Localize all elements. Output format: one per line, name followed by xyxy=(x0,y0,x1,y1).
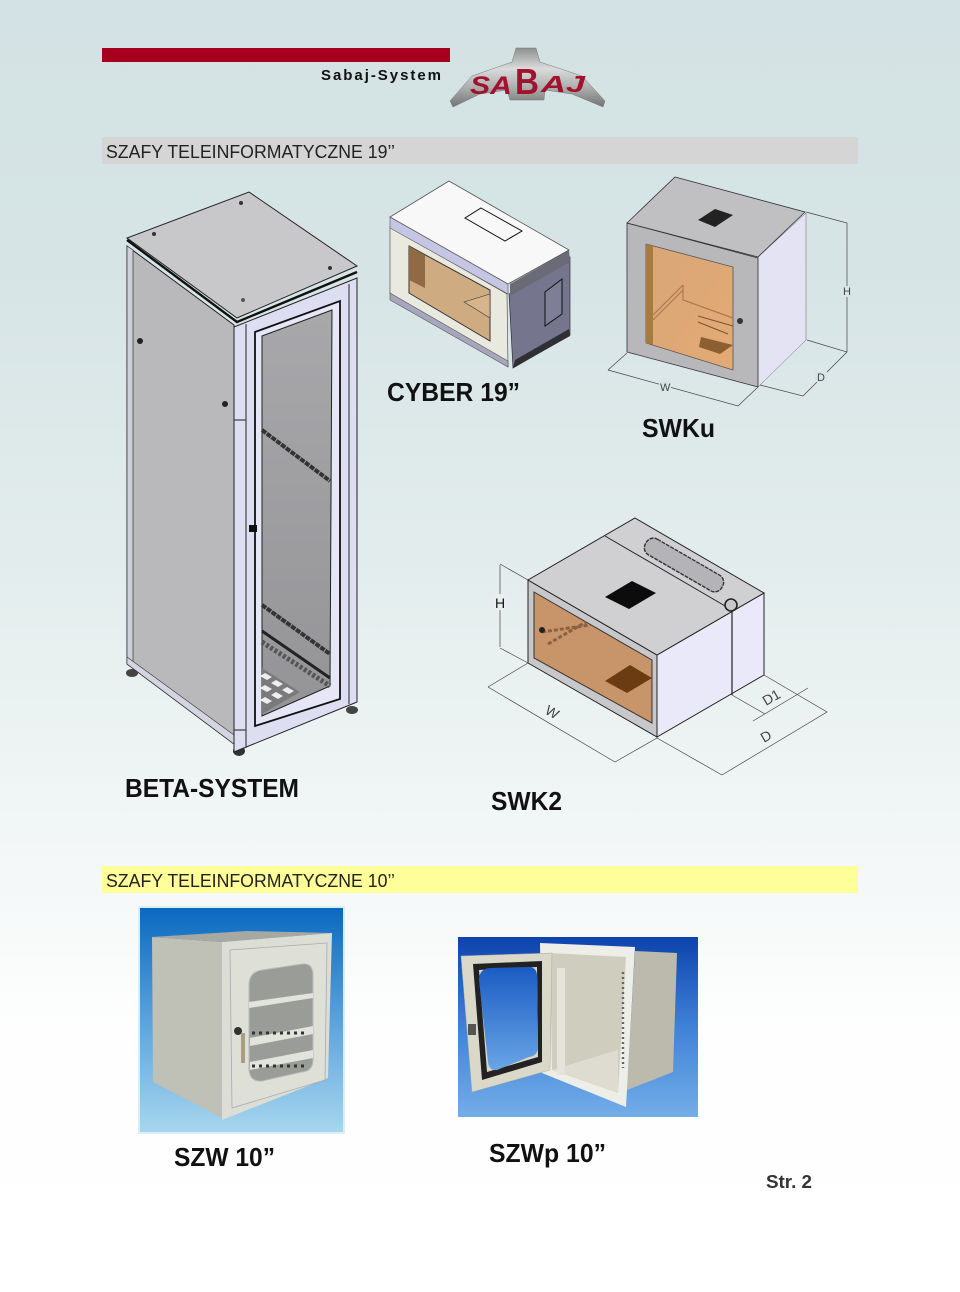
side xyxy=(758,213,806,387)
dimensions xyxy=(608,212,852,406)
door xyxy=(255,301,340,726)
floor grid xyxy=(262,668,300,714)
product: SWK2 wall cabinet xyxy=(488,518,827,775)
dimensions: D xyxy=(817,372,825,384)
side panel xyxy=(127,246,234,744)
photo: SZWp 10 cabinet xyxy=(458,937,698,1117)
dimensions: H xyxy=(495,595,505,611)
top xyxy=(627,177,805,257)
front xyxy=(528,580,657,737)
dimensions: H xyxy=(843,286,851,298)
dimensions: D xyxy=(758,727,774,746)
product: CYBER 19 wall cabinet xyxy=(390,181,570,368)
lilac band xyxy=(390,217,508,294)
label: SWK2: SWK2 xyxy=(491,786,562,816)
feet xyxy=(126,669,138,677)
product: SWKu wall cabinet xyxy=(608,177,852,406)
dimensions: W xyxy=(542,702,563,723)
icon: Sabaj logo: SA xyxy=(470,72,512,100)
icon: Sabaj logo xyxy=(450,48,605,107)
section heading: 10 inch cabinets: SZAFY TELEINFORMATYCZNE 10’’ xyxy=(106,871,395,891)
shelf rails xyxy=(262,430,330,654)
side xyxy=(509,257,570,368)
company name: Sabaj-System xyxy=(321,67,441,84)
front xyxy=(390,227,508,367)
dimensions: D1 xyxy=(760,686,783,709)
door glass xyxy=(262,310,332,716)
dimensions xyxy=(488,564,827,775)
dimensions: W xyxy=(660,382,671,394)
label: SWKu: SWKu xyxy=(642,413,715,443)
photo: SZW 10 cabinet xyxy=(138,906,345,1134)
icon: Sabaj logo: B xyxy=(515,61,539,102)
section heading: 19 inch cabinets: SZAFY TELEINFORMATYCZNE 19’’ xyxy=(106,142,395,162)
handle and knobs xyxy=(249,525,257,532)
label: BETA-SYSTEM: BETA-SYSTEM xyxy=(125,773,299,803)
top xyxy=(127,192,357,318)
top xyxy=(528,518,764,655)
section heading: 10 inch cabinets xyxy=(102,866,858,893)
front xyxy=(627,223,758,387)
header red bar xyxy=(102,48,450,62)
page number: Str. 2 xyxy=(766,1172,812,1192)
top xyxy=(390,181,569,284)
glass xyxy=(646,244,733,370)
label: CYBER 19: CYBER 19” xyxy=(387,377,520,407)
label: SZW 10: SZW 10” xyxy=(174,1142,275,1172)
label: SZWp 10: SZWp 10” xyxy=(489,1138,606,1168)
section heading: 19 inch cabinets xyxy=(102,137,858,164)
icon: Sabaj logo: AJ xyxy=(540,71,587,97)
side xyxy=(657,593,764,737)
product: BETA-SYSTEM floor cabinet xyxy=(126,192,358,756)
front frame xyxy=(234,278,357,752)
